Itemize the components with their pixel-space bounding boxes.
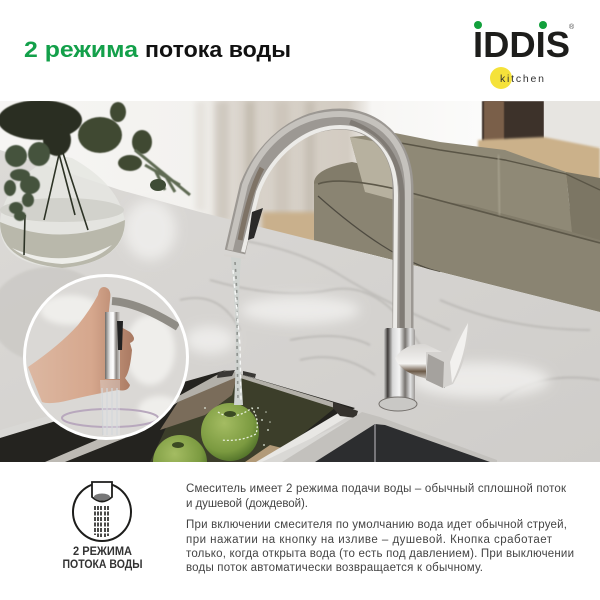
apples — [153, 403, 271, 462]
description: paragraph 2: При включении смесителя по умолчанию вода идет обычной струей, — [186, 519, 567, 531]
description: paragraph 2 — [186, 519, 574, 574]
description: paragraph 1: Смеситель имеет 2 режима подачи воды – обычный сплошной поток — [186, 483, 567, 495]
icon label — [62, 546, 142, 571]
sofa — [314, 133, 600, 312]
title: 2 режима — [24, 37, 139, 62]
logo: IDDIS kitchen: kitchen — [500, 73, 544, 85]
inset circle: hand on shower head — [24, 276, 188, 438]
marble counter — [0, 150, 600, 462]
description: paragraph 1 — [186, 483, 567, 510]
hand — [28, 287, 134, 403]
hose — [112, 301, 178, 327]
icon label: ПОТОКА ВОДЫ — [62, 559, 142, 571]
logo: IDDIS kitchen: ® — [569, 23, 575, 31]
left sink — [0, 370, 375, 462]
base — [384, 328, 415, 406]
water stream — [232, 262, 243, 405]
description: paragraph 2: при нажатии на кнопку на изливе – душевой. Кнопка сработает — [186, 534, 553, 546]
photo: kitchen scene — [0, 100, 600, 489]
logo: IDDIS kitchen — [473, 21, 575, 89]
vase with plant — [0, 100, 190, 268]
room background with curtains — [0, 101, 600, 255]
spray — [102, 388, 117, 435]
title — [24, 37, 291, 62]
foliage — [0, 100, 152, 221]
icon: two-mode aerator — [73, 482, 131, 541]
description: paragraph 2: только, когда открыта вода (то есть под давлением). При выключении — [186, 548, 574, 560]
spout — [224, 114, 408, 335]
right sink — [282, 412, 497, 462]
bowl — [62, 409, 158, 427]
spray button — [248, 208, 263, 240]
logo: IDDIS kitchen: IDDIS — [473, 24, 570, 65]
shower head — [105, 312, 120, 379]
description: paragraph 2: воды поток автоматически возвращается к обычному. — [186, 562, 483, 574]
icon label: 2 РЕЖИМА — [73, 546, 132, 558]
basin interior — [150, 376, 336, 462]
round plate — [0, 268, 84, 356]
faucet — [224, 114, 469, 411]
handle — [395, 344, 445, 388]
title: потока воды — [145, 37, 291, 62]
description: paragraph 1: и душевой (дождевой). — [186, 498, 308, 510]
